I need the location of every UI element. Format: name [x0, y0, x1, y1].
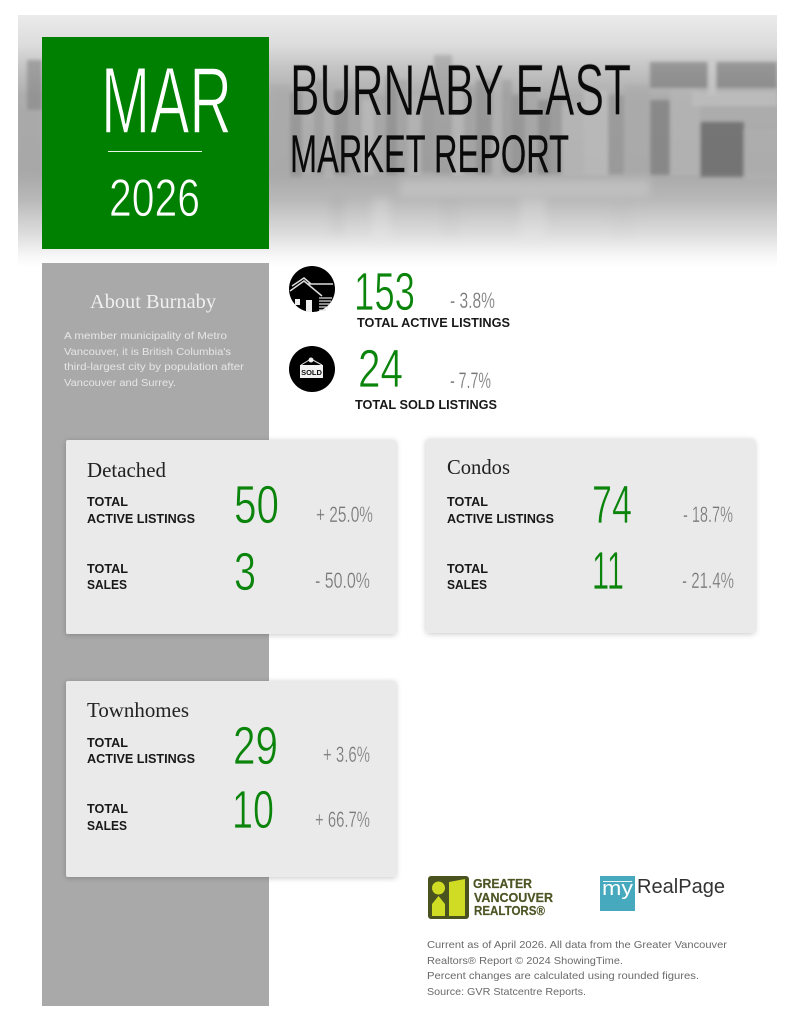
divider rule — [108, 151, 202, 152]
logo: myRealPage: my — [602, 878, 633, 900]
icon: sold sign: SOLD — [301, 368, 322, 377]
condos sales value: 11 — [592, 541, 624, 601]
about body: A member municipality of Metro — [64, 330, 227, 342]
logo: Greater Vancouver Realtors: REALTORS® — [474, 904, 546, 918]
stat: total active listings — [289, 262, 510, 330]
about body: Vancouver and Surrey. — [64, 377, 176, 389]
header skyline photo — [18, 15, 777, 268]
logo: Greater Vancouver Realtors: VANCOUVER — [474, 891, 553, 905]
townhomes sales label: SALES — [87, 819, 127, 833]
title — [290, 51, 631, 184]
detached active label: ACTIVE LISTINGS — [87, 512, 195, 526]
footer note: Source: GVR Statcentre Reports. — [427, 986, 586, 998]
about Burnaby text — [64, 292, 245, 389]
condos sales label: SALES — [447, 578, 487, 592]
logo: Greater Vancouver Realtors: GREATER — [473, 877, 532, 891]
detached sales label: TOTAL — [87, 562, 128, 576]
stat: total sold listings: 24 — [358, 339, 403, 399]
townhomes active label: TOTAL — [87, 736, 128, 750]
detached sales change: - 50.0% — [315, 568, 370, 593]
detached heading: Detached — [87, 458, 166, 482]
detached active change: + 25.0% — [316, 502, 373, 527]
condos active change: - 18.7% — [683, 502, 733, 527]
stat: total sold listings: TOTAL SOLD LISTINGS — [355, 398, 497, 412]
condos active value: 74 — [592, 475, 632, 535]
logo: Greater Vancouver Realtors — [428, 876, 553, 919]
detached active label: TOTAL — [87, 495, 128, 509]
logo: myRealPage: RealPage — [637, 876, 725, 898]
detached sales label: SALES — [87, 578, 127, 592]
detached active value: 50 — [234, 475, 279, 535]
stat: total active listings: - 3.8% — [450, 288, 495, 313]
logo: myRealPage — [600, 876, 725, 911]
townhomes sales label: TOTAL — [87, 802, 128, 816]
stat: total sold listings — [289, 339, 497, 412]
about heading: About Burnaby — [90, 292, 216, 313]
year: 2026 — [109, 169, 200, 228]
footer note: Realtors® Report © 2024 ShowingTime. — [427, 955, 623, 967]
detached sales value: 3 — [234, 542, 256, 602]
footer note: Percent changes are calculated using rounded figures. — [427, 970, 699, 982]
panel: condos — [426, 439, 755, 633]
townhomes sales value: 10 — [232, 780, 274, 840]
condos active label: ACTIVE LISTINGS — [447, 512, 554, 526]
icon: house — [289, 266, 335, 312]
about body: third-largest city by population after — [64, 361, 245, 373]
month: MAR — [101, 48, 232, 154]
month and year panel — [42, 37, 269, 249]
panel: townhomes — [66, 681, 396, 877]
townhomes active change: + 3.6% — [323, 742, 370, 767]
townhomes sales change: + 66.7% — [315, 807, 370, 832]
stat: total active listings: 153 — [354, 262, 415, 322]
panel: detached — [66, 440, 396, 634]
townhomes heading: Townhomes — [87, 698, 189, 722]
condos sales label: TOTAL — [447, 562, 488, 576]
condos active label: TOTAL — [447, 495, 488, 509]
title line: Market Report: MARKET REPORT — [290, 125, 569, 184]
condos heading: Condos — [447, 455, 510, 479]
condos sales change: - 21.4% — [682, 568, 734, 593]
stat: total sold listings: - 7.7% — [450, 368, 491, 393]
sidebar — [42, 263, 269, 1006]
townhomes active value: 29 — [233, 716, 278, 776]
stat: total active listings: TOTAL ACTIVE LISTINGS — [357, 316, 510, 330]
about body: Vancouver, it is British Columbia's — [64, 346, 231, 358]
icon: sold sign — [289, 346, 335, 392]
footer note: Current as of April 2026. All data from the Greater Vancouver — [427, 939, 728, 951]
townhomes active label: ACTIVE LISTINGS — [87, 752, 195, 766]
